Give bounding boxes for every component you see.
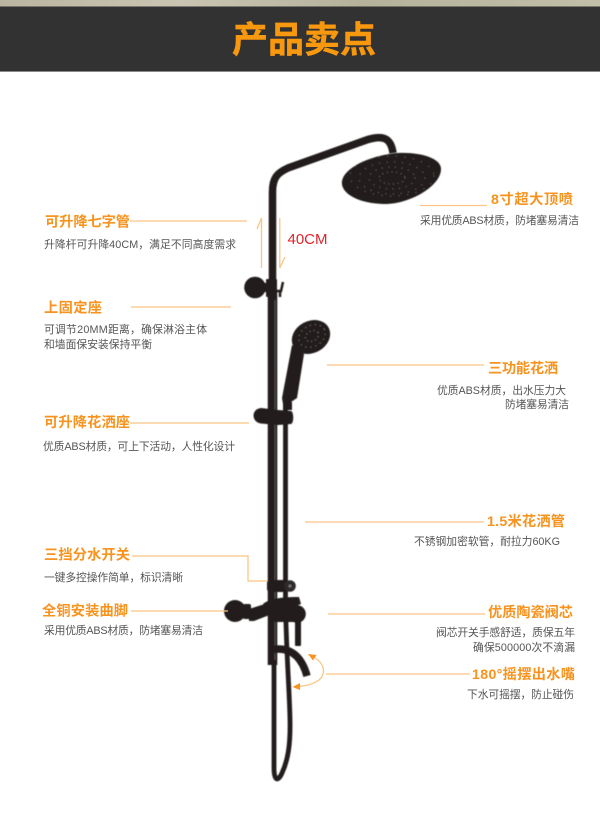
callout: 8寸超大顶喷 (420, 191, 579, 227)
callout: 三功能花洒: 防堵塞易清洁 (505, 397, 569, 411)
callout: 可升降七字管: 升降杆可升降40CM，满足不同高度需求 (44, 237, 236, 251)
callout: 可升降花洒座 (43, 414, 249, 453)
callout: 三挡分水开关 (44, 546, 267, 584)
callout: 全铜安装曲脚 (42, 602, 228, 637)
callout: 可升降七字管: 可升降七字管 (45, 214, 130, 230)
callout: 上固定座: 上固定座 (44, 300, 102, 316)
40CM height indicator: 40CM (288, 231, 328, 248)
callout: 三挡分水开关: 三挡分水开关 (44, 546, 130, 564)
callout: 1.5米花洒管 (305, 513, 565, 548)
hose (274, 405, 290, 779)
callout: 优质陶瓷阀芯 (328, 604, 575, 654)
callout: 优质陶瓷阀芯: 阀芯开关手感舒适，质保五年 (436, 625, 575, 639)
callout: 可升降花洒座: 优质ABS材质，可上下活动，人性化设计 (43, 439, 235, 453)
callout: 180°摇摆出水嘴: 180°摇摆出水嘴 (472, 666, 575, 683)
callout: 180°摇摆出水嘴 (326, 666, 575, 701)
callout: 上固定座 (44, 300, 231, 351)
icon: wall bracket (244, 277, 283, 298)
callout: 三功能花洒 (327, 360, 569, 411)
callout: 1.5米花洒管: 1.5米花洒管 (487, 513, 565, 530)
callout: 优质陶瓷阀芯: 确保500000次不滴漏 (473, 640, 575, 654)
callout: 三功能花洒: 三功能花洒 (488, 360, 558, 377)
callout: 180°摇摆出水嘴: 下水可摇摆，防止碰伤 (467, 687, 574, 701)
40CM height indicator (257, 218, 328, 268)
callout: 8寸超大顶喷: 采用优质ABS材质，防堵塞易清洁 (420, 213, 579, 227)
callout: 上固定座: 可调节20MM距离，确保淋浴主体 (44, 322, 207, 336)
callout: 三功能花洒: 优质ABS材质，出水压力大 (437, 383, 566, 397)
icon: hand shower (282, 313, 336, 410)
icon: overhead rain shower head (342, 153, 441, 204)
main riser and top arm (272, 138, 393, 300)
icon: tub spout (270, 649, 307, 676)
callout: 全铜安装曲脚: 全铜安装曲脚 (42, 602, 128, 620)
header banner (0, 0, 600, 72)
callout: 三挡分水开关: 一键多控操作简单，标识清晰 (44, 570, 183, 584)
icon: diverter valve (267, 580, 296, 592)
callout: 8寸超大顶喷: 8寸超大顶喷 (491, 191, 573, 208)
callout: 可升降七字管 (44, 214, 247, 251)
callout: 1.5米花洒管: 不锈钢加密软管，耐拉力60KG (414, 534, 560, 548)
title: 产品卖点 (232, 19, 376, 60)
callout: 可升降花洒座: 可升降花洒座 (44, 414, 130, 431)
shower column product illustration (224, 138, 441, 779)
callout: 全铜安装曲脚: 采用优质ABS材质，防堵塞易清洁 (44, 623, 203, 637)
callout: 优质陶瓷阀芯: 优质陶瓷阀芯 (488, 604, 573, 621)
180 degree swing arrow (292, 654, 324, 690)
icon: mixer valve and wall mount (224, 597, 306, 646)
callout: 上固定座: 和墙面保安装保持平衡 (44, 337, 152, 351)
icon: sliding seat (254, 408, 293, 425)
